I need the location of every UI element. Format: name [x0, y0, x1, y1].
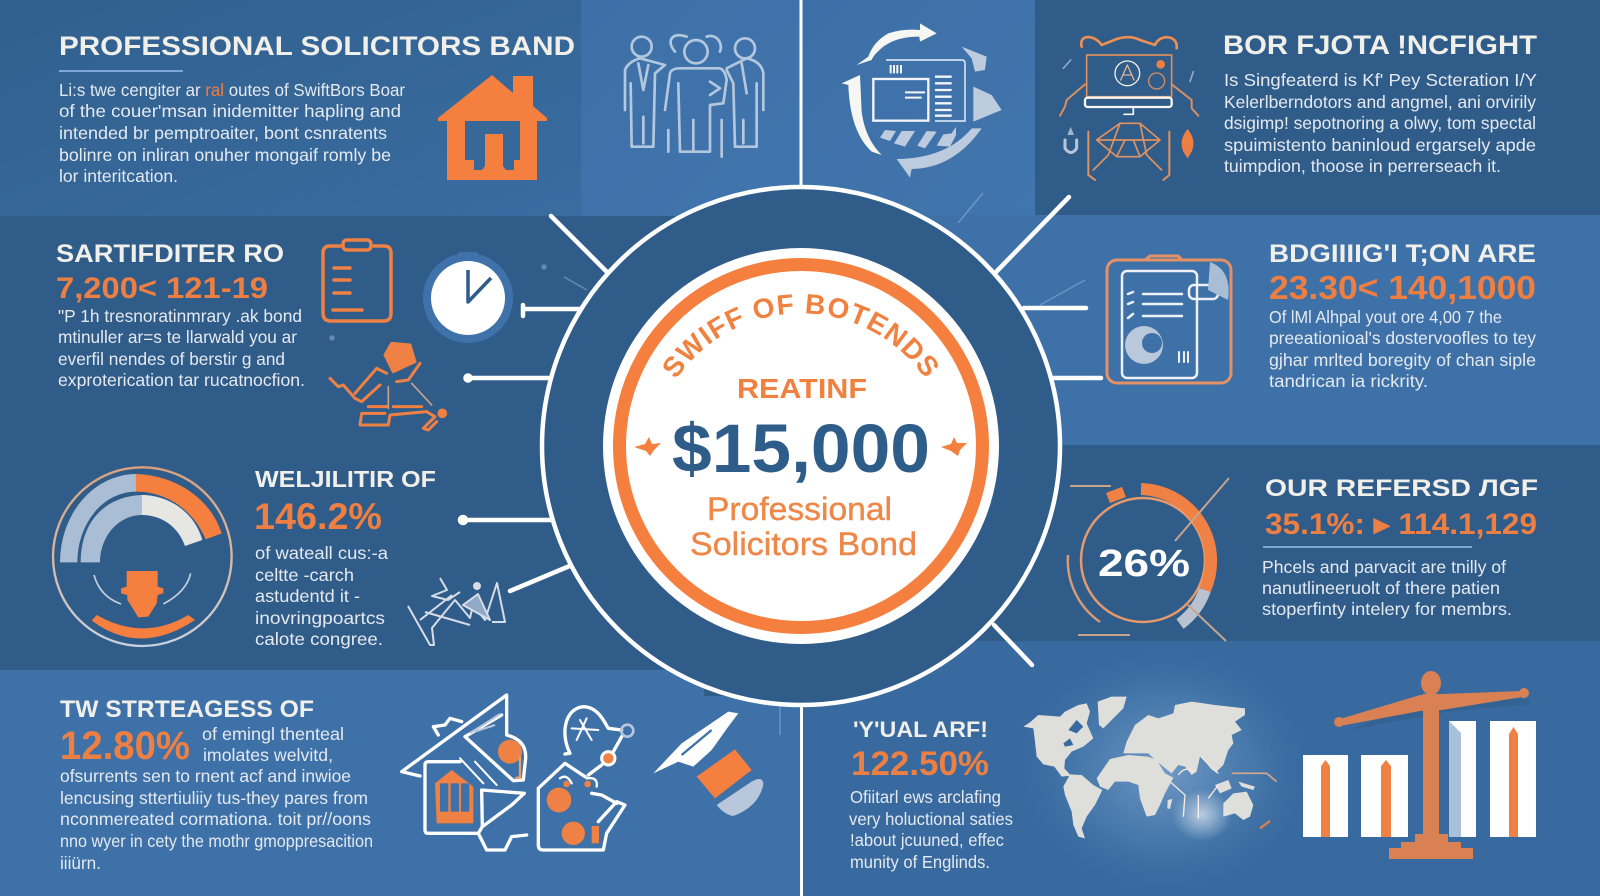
body text: gjhar mrlted boregity of chan siple [1269, 350, 1536, 370]
icon: justice scale [1334, 671, 1530, 859]
heading: BDGIIIIG'I T;ON ARE [1269, 240, 1536, 268]
body text: Kelerlberndotors and angmel, ani orvirily [1224, 92, 1536, 112]
panel: top left intro [59, 31, 575, 186]
icon: clock [423, 252, 513, 343]
gauge pointer [121, 571, 163, 617]
body text: tuimpdion, thoose in perrerseach it. [1224, 156, 1501, 176]
body text: lencusing sttertiuliiy tus-they pares from [60, 788, 368, 808]
body text: celtte -carch [255, 565, 354, 585]
panel background: bottom centre patch [704, 670, 800, 696]
donut chart [1068, 478, 1229, 641]
icon: figure sketch [408, 578, 505, 645]
figure: 7,200< 121-19 [56, 272, 268, 305]
centre vertical divider lines [800, 0, 803, 896]
body text: Ofiitarl ews arclafing [850, 787, 1001, 807]
body text: "P 1h tresnoratinmrary .ak bond [58, 306, 302, 326]
panel: bottom right world and scale [849, 645, 1536, 895]
body text: !about jcuuned, effec [850, 830, 1004, 850]
panel background: bottom left [0, 670, 800, 896]
body text [60, 724, 373, 873]
panel background: top right insight [1035, 0, 1600, 215]
gauge chart [53, 467, 232, 646]
icon: monitor and web [1060, 37, 1198, 180]
icon: house with document [402, 695, 527, 850]
subtitle: REATINF [737, 373, 867, 404]
body text: spuimistento baninloud ergarsely apde [1224, 135, 1536, 155]
heading: 'Y'UAL ARF! [853, 717, 988, 742]
body text: intended br pemptroaiter, bont csnratents [59, 123, 387, 143]
body text: imolates welvitd, [203, 745, 333, 765]
heading: SARTIFDITER RO [56, 240, 284, 268]
heading: TW STRTEAGESS OF [60, 696, 314, 723]
figure: 23.30< 140,1000 [1269, 269, 1536, 306]
world map [1023, 697, 1277, 838]
glow behind map [1015, 645, 1315, 895]
icon: tool at work [330, 343, 446, 430]
arrow fragments [880, 47, 1002, 178]
donut value: 26% [1098, 543, 1190, 585]
icon: clipboard document [1107, 256, 1231, 383]
curved title: SWIFF OF BOTENDS [664, 294, 938, 377]
panel background: right middle upper [800, 215, 1600, 445]
body text [1224, 70, 1537, 176]
panel: right middle clipboard [1107, 240, 1536, 391]
panel background: top left [0, 0, 581, 216]
body text [58, 306, 305, 390]
body text: very holuctional saties [849, 809, 1013, 829]
panel: bottom left strategies [60, 695, 763, 873]
star right [941, 437, 967, 456]
icon: network house [538, 707, 633, 850]
body text: nanutlineeruolt of there patien [1262, 578, 1500, 598]
heading: PROFESSIONAL SOLICITORS BAND [59, 31, 575, 61]
orange ring [620, 264, 982, 628]
label: Professional [707, 491, 892, 527]
body text: of wateall cus:-a [255, 543, 388, 563]
central seal [603, 248, 999, 644]
body text: nconmereated cormationa. toit pr//oons [60, 809, 371, 829]
faint decorative marks [330, 193, 1085, 735]
panel background: right middle lower [800, 445, 1600, 641]
panel background: bottom right [800, 641, 1600, 896]
body text: nno wyer in cety the mothr gmoppresacition [60, 831, 373, 851]
label [690, 491, 917, 562]
body text: iiiürn. [60, 853, 101, 873]
body text [1269, 307, 1536, 391]
panel: left middle certificate [56, 240, 513, 430]
figure: 12.80% [60, 724, 190, 768]
heading underline [1263, 546, 1472, 548]
panel: right middle donut [1068, 475, 1538, 641]
body text: ofsurrents sen to rnent acf and inwioe [60, 766, 351, 786]
body text: mtinuller ar=s te llarwald you ar [58, 327, 297, 347]
body text: of emingl thenteal [202, 724, 344, 744]
body text: tandrican ia rickrity. [1269, 371, 1428, 391]
panel background: top right arrows [800, 0, 1035, 216]
connector spokes [460, 197, 1101, 665]
body text: preeationioal's dostervoofles to tey [1269, 328, 1536, 348]
bar chart [1303, 721, 1536, 837]
body text: bolinre on inliran onuher mongaif romly be [59, 145, 391, 165]
body text: astudentd it - [255, 586, 360, 606]
body text: Li:s twe cengiter ar ral outes of SwiftBors Boar [59, 80, 405, 100]
panel: top right insight [1060, 30, 1538, 180]
body text: Of lMl Alhpal yout ore 4,00 7 the [1269, 307, 1502, 327]
body text: Phcels and parvacit are tnilly of [1262, 557, 1506, 577]
body text: Is Singfeaterd is Kf' Pey Scteration I/Y [1224, 70, 1537, 90]
icon: graduation cap [653, 712, 763, 816]
heading: WELJILITIR OF [255, 466, 436, 492]
body text: dsigimp! sepotnoring a olwy, tom spectal [1224, 113, 1536, 133]
body text: exproterication tar rucatnocfion. [58, 370, 305, 390]
heading: OUR REFERSD ЛGF [1265, 475, 1538, 502]
body text: inovringpoartcs [255, 608, 385, 628]
document [873, 60, 965, 121]
white disc [603, 248, 999, 644]
figure: 122.50% [851, 745, 989, 783]
icon: group of people [625, 35, 763, 157]
body text: everfil nendes of berstir g and [58, 349, 285, 369]
central seal ring [542, 187, 1060, 705]
body text: munity of Englinds. [850, 852, 990, 872]
map sparkle [1172, 789, 1232, 841]
body text: of the couer'msan inidemitter hapling and [59, 101, 401, 121]
heading: BOR FJOTA !NCFIGHT [1223, 30, 1538, 60]
icon: house [438, 75, 547, 180]
icon: circular arrows with document [842, 23, 1002, 178]
body text: stoperfinty intelery for membrs. [1262, 599, 1512, 619]
amount: $15,000 [672, 410, 930, 487]
icon: clipboard [323, 240, 391, 321]
star left [634, 437, 661, 456]
body text [255, 543, 388, 649]
panel background: left middle [0, 216, 800, 670]
figure: 35.1%: ▸ 114.1,129 [1265, 508, 1537, 541]
heading underline [59, 70, 183, 72]
body text [849, 787, 1013, 872]
body text [59, 80, 405, 186]
body text: calote congree. [255, 629, 383, 649]
label: Solicitors Bond [690, 526, 917, 562]
panel background: top left people [581, 0, 800, 216]
arrows [842, 23, 937, 155]
body text [1262, 557, 1512, 619]
body text: lor interitcation. [59, 166, 178, 186]
figure: 146.2% [254, 496, 382, 537]
panel: left middle gauge [53, 466, 505, 649]
